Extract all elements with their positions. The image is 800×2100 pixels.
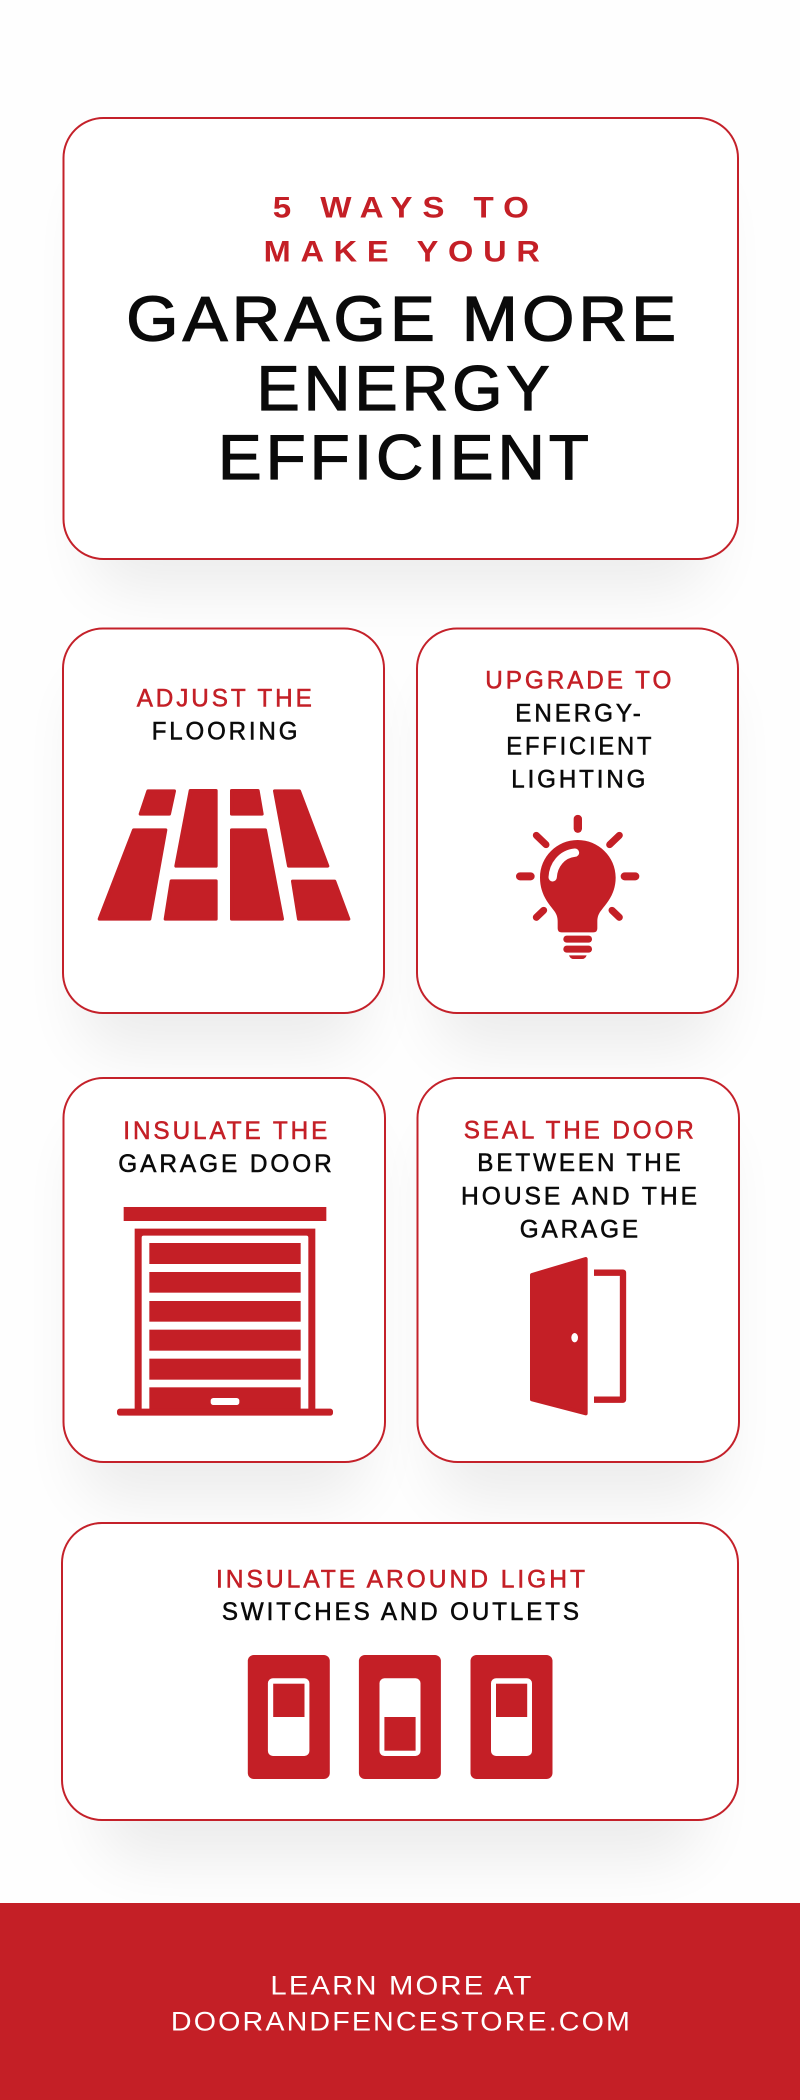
heading: adjust the flooring: ADJUST THE (137, 685, 315, 713)
heading: upgrade to energy-efficient lighting: EFFICIENT (506, 732, 654, 760)
heading: upgrade to energy-efficient lighting: LIGHTING (511, 765, 648, 793)
title: garage more energy efficient: EFFICIENT (218, 423, 593, 493)
heading: 5 ways to make your: 5 WAYS TO (273, 191, 539, 224)
heading: 5 ways to make your (264, 191, 550, 269)
title: garage more energy efficient: GARAGE MORE (126, 284, 680, 354)
panel: title card (64, 118, 738, 590)
panel: insulate the garage door (64, 1078, 385, 1500)
icon: open door (532, 1259, 623, 1413)
icon: light switch up (248, 1655, 330, 1779)
heading: seal the door between the house and the garage: BETWEEN THE (477, 1149, 684, 1177)
heading: adjust the flooring: FLOORING (152, 717, 300, 745)
heading: upgrade to energy-efficient lighting: UPGRADE TO (485, 666, 674, 694)
icon: light switch up (470, 1655, 552, 1779)
heading: upgrade to energy-efficient lighting (485, 666, 674, 793)
footer text: DOORANDFENCESTORE.COM (171, 2006, 632, 2036)
footer banner (0, 1903, 800, 2100)
panel: insulate around light switches and outlets (62, 1523, 738, 1860)
heading: seal the door between the house and the garage: GARAGE (520, 1215, 641, 1243)
footer text (171, 1970, 632, 2036)
panel: adjust the flooring (63, 628, 384, 1050)
heading: insulate around light switches and outlets (216, 1565, 588, 1626)
title: garage more energy efficient: ENERGY (257, 354, 554, 424)
icon: garage door (117, 1207, 333, 1416)
heading: insulate the garage door: GARAGE DOOR (118, 1150, 335, 1178)
heading: seal the door between the house and the garage: HOUSE AND THE (461, 1182, 700, 1210)
icon: light bulb (520, 819, 635, 959)
heading: insulate the garage door: INSULATE THE (123, 1117, 330, 1145)
icon: light switch down (359, 1655, 441, 1779)
heading: adjust the flooring (137, 685, 315, 745)
heading: insulate around light switches and outlets: INSULATE AROUND LIGHT (216, 1565, 588, 1593)
panel: seal the door (418, 1078, 739, 1500)
heading: seal the door between the house and the garage (461, 1116, 700, 1243)
panel: energy-efficient lighting (417, 628, 738, 1050)
title: garage more energy efficient (126, 284, 680, 493)
heading: insulate around light switches and outlets: SWITCHES AND OUTLETS (222, 1598, 582, 1626)
footer text: LEARN MORE AT (270, 1970, 534, 2000)
heading: insulate the garage door (118, 1117, 335, 1178)
heading: upgrade to energy-efficient lighting: ENERGY- (515, 700, 644, 728)
heading: 5 ways to make your: MAKE YOUR (264, 236, 550, 269)
heading: seal the door between the house and the garage: SEAL THE DOOR (464, 1116, 697, 1144)
icon: floor tiles (99, 791, 349, 919)
